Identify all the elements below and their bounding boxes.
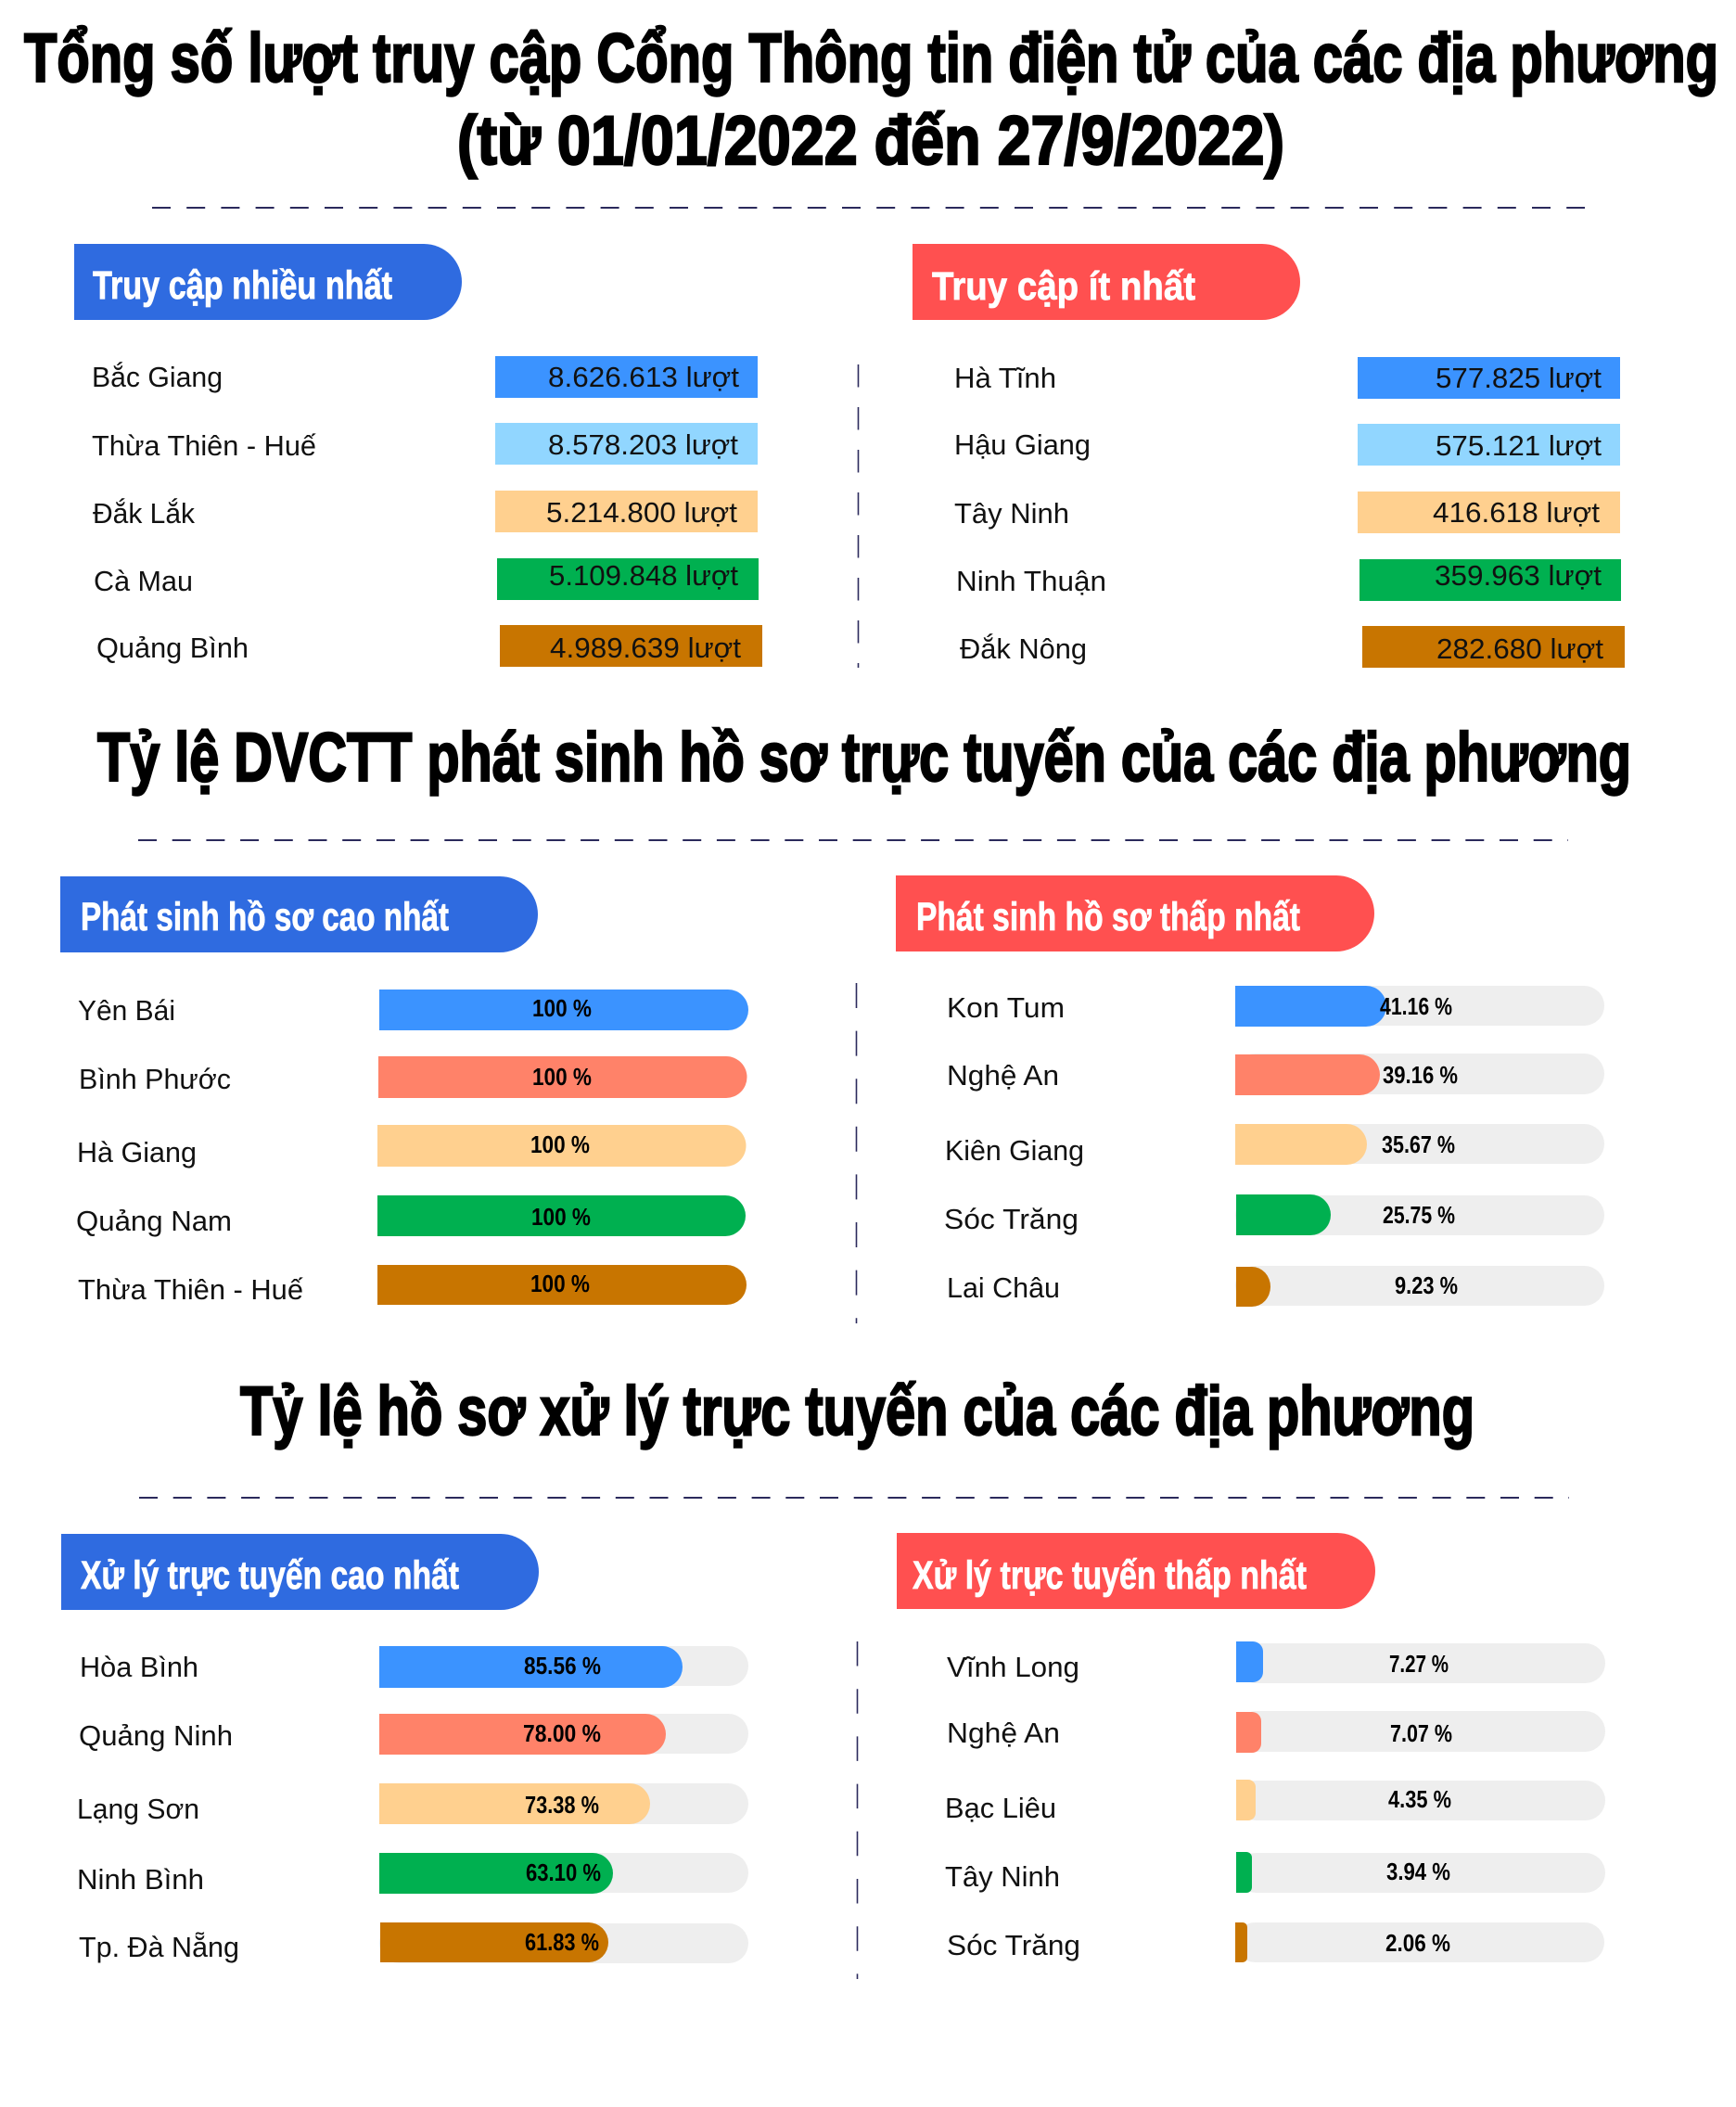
row: Bình Phước bbox=[79, 1056, 747, 1098]
title: tổng số lượt truy cập: (từ 01/01/2022 đến 27/9/2022) bbox=[457, 102, 1284, 179]
row: Hòa Bình: Hòa Bình bbox=[80, 1651, 198, 1683]
row: Quảng Ninh: 78.00 % bbox=[523, 1719, 601, 1747]
row: Hậu Giang bbox=[954, 424, 1620, 466]
row: Lai Châu bbox=[947, 1266, 1604, 1307]
row: Yên Bái: Yên Bái bbox=[78, 994, 175, 1027]
row: Hà Tĩnh: Hà Tĩnh bbox=[954, 362, 1056, 394]
row: Đắk Lắk: 5.214.800 lượt bbox=[546, 496, 737, 529]
row: Bạc Liêu: Bạc Liêu bbox=[945, 1792, 1056, 1824]
row: Tây Ninh bbox=[954, 492, 1620, 533]
row: Cà Mau: 5.109.848 lượt bbox=[549, 559, 738, 592]
row: Hà Tĩnh: 577.825 lượt bbox=[1436, 362, 1602, 394]
row: Lạng Sơn bbox=[77, 1783, 748, 1825]
row: Ninh Bình bbox=[77, 1853, 748, 1896]
row: Vĩnh Long: 7.27 % bbox=[1389, 1650, 1449, 1678]
panel heading: truy cập nhiều nhất: Truy cập nhiều nhất bbox=[93, 263, 392, 308]
panel heading: truy cập ít nhất: Truy cập ít nhất bbox=[932, 264, 1195, 309]
row: Hậu Giang: 575.121 lượt bbox=[1436, 429, 1602, 462]
row: Thừa Thiên - Huế: Thừa Thiên - Huế bbox=[78, 1273, 303, 1306]
panel heading: xử lý trực tuyến thấp nhất bbox=[897, 1533, 1375, 1609]
row: Bắc Giang bbox=[92, 356, 758, 398]
row: Thừa Thiên - Huế: Thừa Thiên - Huế bbox=[92, 429, 316, 462]
row: Nghệ An: 39.16 % bbox=[1383, 1061, 1458, 1089]
row: Hậu Giang: Hậu Giang bbox=[954, 428, 1091, 461]
row: Bắc Giang: Bắc Giang bbox=[92, 361, 223, 393]
row: Quảng Nam bbox=[76, 1195, 746, 1237]
row: Sóc Trăng bbox=[947, 1922, 1604, 1962]
row: Vĩnh Long bbox=[947, 1641, 1605, 1683]
panel heading: phát sinh hồ sơ thấp nhất bbox=[896, 875, 1374, 951]
row: Ninh Thuận: 359.963 lượt bbox=[1435, 559, 1602, 592]
row: Bạc Liêu bbox=[945, 1780, 1605, 1824]
row: Sóc Trăng: Sóc Trăng bbox=[944, 1203, 1079, 1235]
row: Quảng Bình: Quảng Bình bbox=[96, 632, 249, 664]
panel heading: phát sinh hồ sơ cao nhất: Phát sinh hồ sơ cao nhất bbox=[81, 895, 449, 939]
row: Vĩnh Long: Vĩnh Long bbox=[947, 1651, 1079, 1683]
panel heading: xử lý trực tuyến thấp nhất: Xử lý trực tuyến thấp nhất bbox=[913, 1553, 1307, 1598]
panel: truy cập ít nhất bbox=[913, 244, 1625, 668]
row: Tây Ninh: 3.94 % bbox=[1386, 1858, 1450, 1885]
panel heading: phát sinh hồ sơ thấp nhất: Phát sinh hồ sơ thấp nhất bbox=[916, 895, 1300, 939]
row: Quảng Bình: 4.989.639 lượt bbox=[550, 632, 741, 664]
row: Hà Giang bbox=[77, 1125, 747, 1168]
panel: xử lý trực tuyến thấp nhất bbox=[897, 1533, 1605, 1962]
row: Lạng Sơn: Lạng Sơn bbox=[77, 1793, 199, 1825]
row: Ninh Thuận bbox=[956, 559, 1621, 601]
row: Kiên Giang bbox=[945, 1124, 1604, 1167]
row: Quảng Bình bbox=[96, 625, 762, 667]
row: Thừa Thiên - Huế: 8.578.203 lượt bbox=[548, 428, 738, 461]
panel heading: xử lý trực tuyến cao nhất: Xử lý trực tuyến cao nhất bbox=[81, 1553, 459, 1598]
row: Bắc Giang: 8.626.613 lượt bbox=[548, 361, 739, 393]
row: Cà Mau: Cà Mau bbox=[94, 565, 193, 597]
panel: phát sinh hồ sơ thấp nhất bbox=[896, 875, 1604, 1307]
row: Kon Tum bbox=[947, 986, 1604, 1027]
row: Bình Phước: Bình Phước bbox=[79, 1063, 231, 1095]
row: Sóc Trăng bbox=[944, 1194, 1604, 1235]
row: Hà Tĩnh bbox=[954, 357, 1620, 399]
row: Nghệ An bbox=[947, 1711, 1605, 1753]
row: Thừa Thiên - Huế bbox=[78, 1265, 747, 1306]
row: Tây Ninh: Tây Ninh bbox=[954, 497, 1069, 530]
row: Cà Mau bbox=[94, 558, 759, 600]
row: Lai Châu: 9.23 % bbox=[1395, 1271, 1458, 1299]
panel heading: truy cập nhiều nhất bbox=[74, 244, 462, 320]
row: Thừa Thiên - Huế bbox=[92, 423, 758, 465]
panel: phát sinh hồ sơ cao nhất bbox=[60, 876, 748, 1306]
panel heading: xử lý trực tuyến cao nhất bbox=[61, 1534, 539, 1610]
row: Hòa Bình: 85.56 % bbox=[524, 1652, 601, 1679]
row: Ninh Thuận: Ninh Thuận bbox=[956, 565, 1106, 597]
row: Tp. Đà Nẵng bbox=[79, 1922, 748, 1963]
row: Tây Ninh: Tây Ninh bbox=[945, 1860, 1060, 1893]
row: Nghệ An bbox=[947, 1054, 1604, 1095]
row: Nghệ An: Nghệ An bbox=[947, 1059, 1059, 1092]
row: Quảng Ninh: Quảng Ninh bbox=[79, 1719, 233, 1752]
row: Tây Ninh bbox=[945, 1852, 1605, 1893]
row: Sóc Trăng: 25.75 % bbox=[1383, 1201, 1455, 1229]
row: Đắk Nông: Đắk Nông bbox=[960, 632, 1087, 665]
row: Kiên Giang: 35.67 % bbox=[1382, 1130, 1455, 1158]
row: Kiên Giang: Kiên Giang bbox=[945, 1134, 1084, 1167]
row: Hà Giang: 100 % bbox=[530, 1130, 590, 1158]
row: Quảng Nam: Quảng Nam bbox=[76, 1205, 232, 1237]
row: Nghệ An: 7.07 % bbox=[1390, 1719, 1452, 1747]
row: Đắk Nông: 282.680 lượt bbox=[1436, 632, 1603, 665]
row: Đắk Nông bbox=[960, 626, 1625, 668]
row: Bạc Liêu: 4.35 % bbox=[1388, 1785, 1451, 1813]
row: Tây Ninh: 416.618 lượt bbox=[1433, 496, 1600, 529]
row: Kon Tum: 41.16 % bbox=[1380, 992, 1452, 1020]
row: Sóc Trăng: Sóc Trăng bbox=[947, 1929, 1080, 1961]
row: Yên Bái: 100 % bbox=[532, 994, 592, 1022]
row: Ninh Bình: 63.10 % bbox=[526, 1858, 601, 1886]
row: Ninh Bình: Ninh Bình bbox=[77, 1863, 204, 1896]
row: Quảng Ninh bbox=[79, 1714, 748, 1755]
row: Sóc Trăng: 2.06 % bbox=[1385, 1929, 1450, 1957]
row: Quảng Nam: 100 % bbox=[531, 1203, 591, 1231]
row: Lai Châu: Lai Châu bbox=[947, 1271, 1060, 1304]
row: Thừa Thiên - Huế: 100 % bbox=[530, 1270, 590, 1297]
panel: truy cập nhiều nhất bbox=[74, 244, 762, 667]
panel heading: phát sinh hồ sơ cao nhất bbox=[60, 876, 538, 952]
panel heading: truy cập ít nhất bbox=[913, 244, 1300, 320]
row: Tp. Đà Nẵng: 61.83 % bbox=[525, 1928, 599, 1956]
row: Bình Phước: 100 % bbox=[532, 1063, 592, 1091]
row: Hà Giang: Hà Giang bbox=[77, 1136, 197, 1168]
panel: xử lý trực tuyến cao nhất bbox=[61, 1534, 748, 1963]
row: Yên Bái bbox=[78, 990, 748, 1030]
title: tổng số lượt truy cập bbox=[24, 19, 1718, 179]
row: Lạng Sơn: 73.38 % bbox=[525, 1791, 599, 1819]
row: Đắk Lắk: Đắk Lắk bbox=[93, 497, 195, 530]
row: Hòa Bình bbox=[80, 1646, 748, 1688]
row: Kon Tum: Kon Tum bbox=[947, 991, 1065, 1024]
row: Tp. Đà Nẵng: Tp. Đà Nẵng bbox=[79, 1931, 239, 1963]
row: Đắk Lắk bbox=[93, 491, 758, 532]
row: Nghệ An: Nghệ An bbox=[947, 1717, 1060, 1749]
